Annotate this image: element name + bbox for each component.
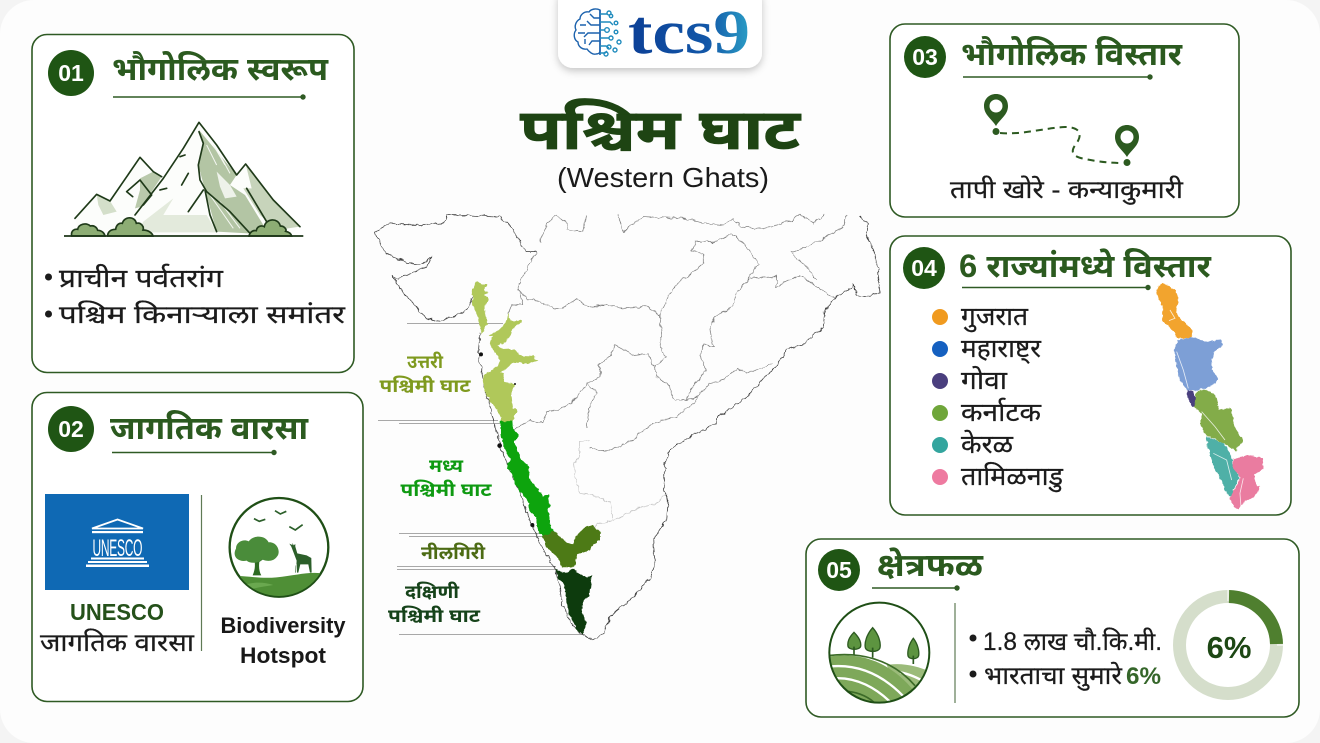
- icon: mountains: [64, 122, 303, 236]
- label: UNESCO: UNESCO: [70, 599, 164, 625]
- region: central Western Ghats: [501, 422, 555, 537]
- region: southern Western Ghats: [555, 569, 592, 635]
- legend: states: केरळ: [961, 429, 1014, 459]
- leader lines: [378, 324, 585, 634]
- label: north: पश्चिमी घाट: [380, 376, 471, 396]
- badge 04: [903, 247, 945, 289]
- chart: 6 percent donut: 6%: [1207, 630, 1251, 665]
- heading 03: भौगोलिक विस्तार: [961, 36, 1183, 72]
- label: south: पश्चिमी घाट: [388, 606, 480, 626]
- label: north: [380, 352, 471, 396]
- route text: तापी खोरे - कन्याकुमारी: [950, 174, 1184, 205]
- region: north Western Ghats: [471, 281, 538, 422]
- badge 02: [48, 406, 94, 452]
- region: Nilgiri: [543, 525, 601, 567]
- bullets 05: [970, 627, 1162, 691]
- panel: 02 world heritage: [32, 392, 363, 702]
- logo wordmark: tcs9: [628, 0, 750, 67]
- label: south: [388, 582, 480, 626]
- label: Nilgiri: नीलगिरी: [421, 543, 486, 563]
- badge 04: 04: [911, 255, 937, 281]
- map: peninsular India with Western Ghats: [375, 213, 880, 639]
- chart: 6 percent donut: [1180, 589, 1285, 694]
- bullets 05: 1.8 लाख चौ.कि.मी.: [983, 627, 1162, 656]
- icon: biodiversity: [227, 498, 328, 604]
- bullets 01: प्राचीन पर्वतरांग: [59, 263, 223, 293]
- logo: tcs9: [558, 0, 762, 68]
- badge 05: [818, 549, 860, 591]
- panel: 01 geographic form: [32, 34, 354, 372]
- legend: states: गोवा: [961, 365, 1008, 395]
- icon: UNESCO flag: [45, 494, 189, 590]
- label: central: मध्य: [429, 456, 464, 476]
- title: पश्चिम घाट: [520, 98, 801, 161]
- icon: farm landscape: [828, 603, 930, 707]
- badge 01: [48, 50, 94, 96]
- heading 04: 6 राज्यांमध्ये विस्तार: [959, 248, 1212, 284]
- badge 02: 02: [58, 416, 84, 442]
- map: states along ghats: [1156, 283, 1264, 509]
- bullets 05: 6%: [1126, 663, 1161, 690]
- panel: 04 six states: [890, 236, 1291, 515]
- legend: states: महाराष्ट्र: [961, 333, 1042, 364]
- icon: UNESCO flag: UNESCO: [92, 536, 143, 562]
- label: biodiversity hotspot: Biodiversity: [220, 613, 346, 638]
- badge 05: 05: [826, 557, 852, 583]
- bullets 05: भारताचा सुमारे: [984, 660, 1123, 691]
- badge 01: 01: [58, 60, 84, 86]
- heading 05: क्षेत्रफळ: [877, 547, 984, 583]
- India outline and state boundaries: [375, 213, 880, 639]
- label: world heritage: जागतिक वारसा: [40, 628, 195, 657]
- heading 01: भौगोलिक स्वरूप: [112, 51, 329, 87]
- label: south: दक्षिणी: [405, 582, 460, 602]
- panel: 03 geographic extent: [890, 24, 1239, 217]
- heading 02: जागतिक वारसा: [110, 410, 309, 446]
- panel: 05 area: [806, 539, 1299, 717]
- bushes: [71, 218, 292, 236]
- legend: states: तामिळनाडु: [961, 461, 1064, 492]
- icon: route pins: [984, 94, 1139, 166]
- legend: states: [932, 301, 1064, 492]
- icon: brain circuit: [574, 9, 621, 56]
- bullets 01: पश्चिम किनाऱ्याला समांतर: [59, 300, 346, 329]
- bullets 01: [45, 263, 346, 329]
- label: central: पश्चिमी घाट: [400, 480, 492, 500]
- legend: states: कर्नाटक: [961, 397, 1042, 427]
- label: north: उत्तरी: [407, 352, 444, 372]
- label: biodiversity hotspot: [220, 613, 346, 668]
- badge 03: 03: [912, 44, 938, 70]
- label: biodiversity hotspot: Hotspot: [240, 643, 327, 668]
- badge 03: [904, 36, 946, 78]
- label: central: [400, 456, 492, 500]
- subtitle: (Western Ghats): [557, 162, 769, 193]
- legend: states: गुजरात: [961, 301, 1029, 332]
